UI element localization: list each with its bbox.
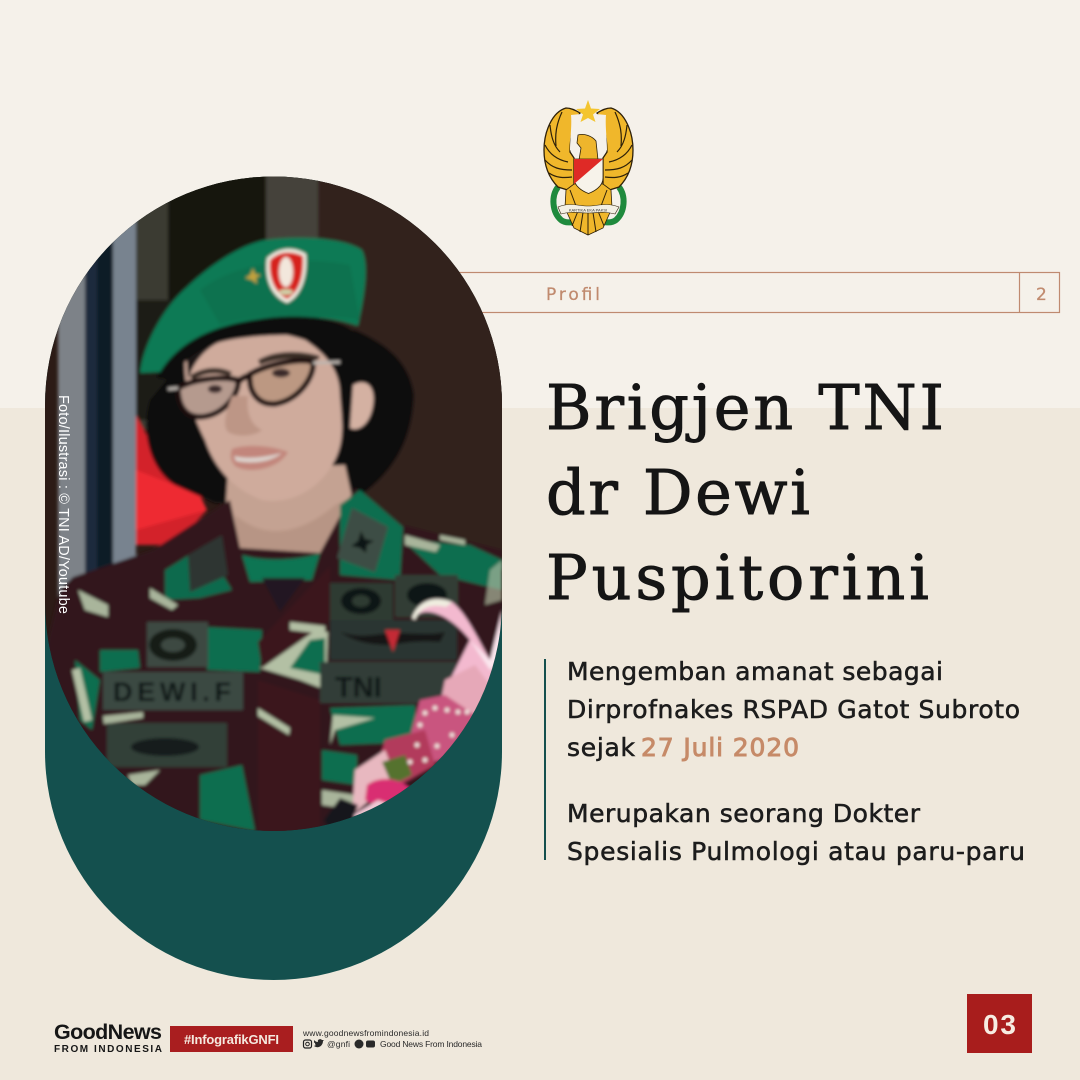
description text: Dirprofnakes RSPAD Gatot Subroto <box>567 695 1020 724</box>
logo: GoodNews From Indonesia: GoodNews <box>54 1020 162 1044</box>
title: dr Dewi <box>546 456 810 529</box>
page number badge <box>967 994 1032 1053</box>
camouflage pieces <box>72 490 502 840</box>
description text <box>567 657 1025 866</box>
shield <box>574 159 603 194</box>
description text: Spesialis Pulmologi atau paru-paru <box>567 837 1025 866</box>
ear <box>350 382 373 429</box>
hashtag badge: #InfografikGNFI <box>184 1032 279 1047</box>
nose and mouth <box>225 396 262 436</box>
eyebrows and eyes <box>190 368 232 380</box>
accent rule <box>544 659 546 860</box>
green wreath <box>553 187 624 222</box>
description text: 27 Juli 2020 <box>641 733 799 762</box>
logo: GoodNews From Indonesia: FROM INDONESIA <box>54 1044 162 1055</box>
banner <box>558 204 619 214</box>
description text: Mengemban amanat sebagai <box>567 657 943 686</box>
chest patches <box>147 622 208 667</box>
social links <box>302 1028 482 1049</box>
camouflage jacket <box>48 488 502 840</box>
description text: sejak <box>567 733 636 762</box>
social links: @gnfi <box>327 1039 350 1049</box>
profile label bar: 2 <box>1036 285 1047 305</box>
photo background stripes <box>58 170 508 620</box>
wings <box>544 108 633 192</box>
hair <box>146 330 414 503</box>
eagle <box>577 134 598 160</box>
description text: Merupakan seorang Dokter <box>567 799 921 828</box>
photo credit: Foto/Ilustrasi : © TNI AD/Youtube <box>55 395 71 614</box>
glasses lenses and frame <box>178 378 238 417</box>
hashtag badge <box>170 1026 293 1052</box>
emblem: TNI AD crest <box>544 100 633 235</box>
emblem: TNI AD crest: KARTIKA EKA PAKSI <box>569 208 607 212</box>
profile label bar: Profil <box>546 285 600 305</box>
beret band <box>157 316 358 380</box>
beret badge <box>266 249 306 303</box>
neck <box>225 465 352 556</box>
logo: GoodNews From Indonesia <box>54 1020 162 1055</box>
social links: www.goodnewsfromindonesia.id <box>302 1028 429 1038</box>
bouquet <box>324 599 502 831</box>
portrait photo: TNI <box>335 672 382 704</box>
title: Puspitorini <box>546 541 929 614</box>
beret <box>140 238 366 373</box>
title: Brigjen TNI <box>546 371 944 444</box>
profile label bar <box>440 272 1060 313</box>
portrait photo: DEWI.F <box>113 677 231 707</box>
social links: Good News From Indonesia <box>380 1039 482 1049</box>
star <box>576 100 600 122</box>
green pill backdrop <box>45 176 502 980</box>
portrait photo <box>40 170 510 850</box>
title <box>546 371 944 614</box>
body and tail <box>565 184 612 235</box>
page number badge: 03 <box>983 1009 1016 1040</box>
collar patches <box>337 508 388 572</box>
face <box>185 330 342 501</box>
